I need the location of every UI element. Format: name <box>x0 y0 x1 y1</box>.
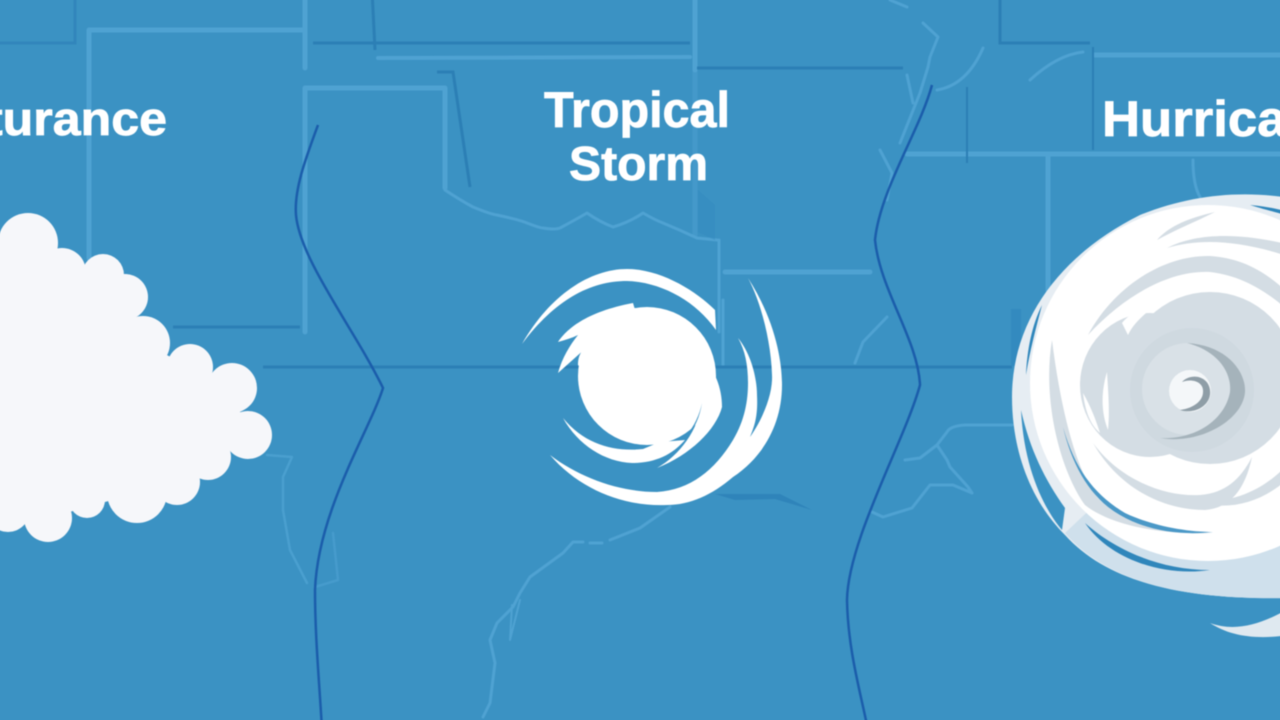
blue slivers <box>1021 205 1280 572</box>
icon: cloud <box>0 213 272 542</box>
grey spiral bands <box>1049 212 1280 533</box>
tail <box>1210 608 1280 637</box>
icon: hurricane <box>1012 194 1280 637</box>
map: dark patches <box>698 190 1021 510</box>
eye spiral <box>1180 377 1210 411</box>
outer cloud ring <box>1012 194 1280 598</box>
white slashes in core <box>1083 298 1165 433</box>
heading: tropical storm: Tropical <box>544 82 730 138</box>
heading: tropical storm: Storm <box>569 138 708 191</box>
divider line left <box>296 125 383 720</box>
dark crescent <box>1160 343 1245 439</box>
divider line right <box>847 85 932 720</box>
lower pale band <box>1065 500 1280 598</box>
map: darker border shadows <box>0 0 1093 367</box>
core rings <box>1130 328 1254 452</box>
heading: tropical storm <box>544 82 730 191</box>
eye <box>1169 370 1211 412</box>
white body <box>1030 205 1280 561</box>
icon: tropical storm <box>522 269 782 505</box>
